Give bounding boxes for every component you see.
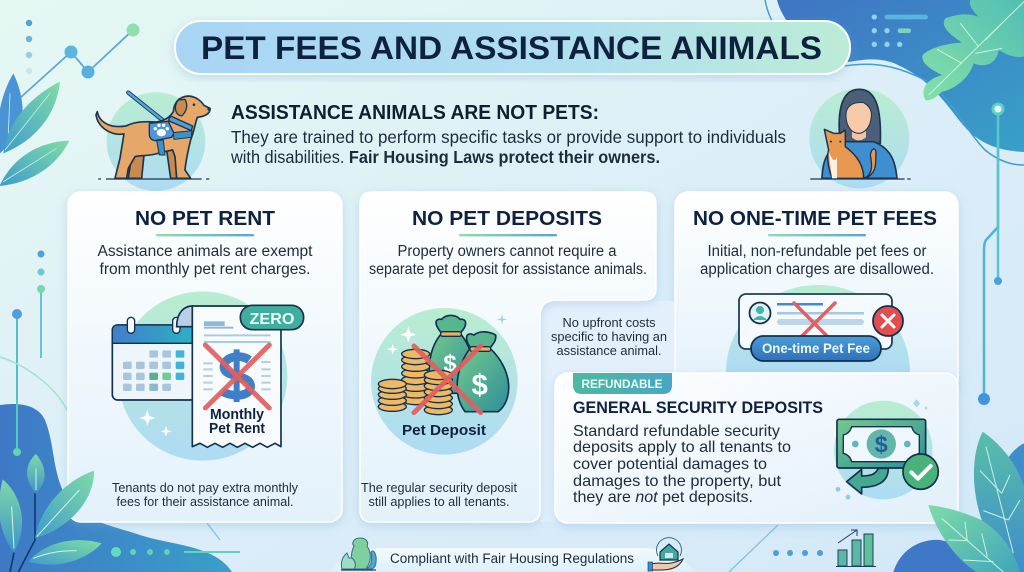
icon: calendar and receipt with zero (112, 291, 304, 461)
tab: refundable: REFUNDABLE (582, 379, 663, 391)
text: pet deposits description: separate pet deposit for assistance animals. (369, 261, 647, 278)
text: no pet rent footnote: Tenants do not pay extra monthly (112, 480, 298, 495)
icon: money bags and coins: $ (443, 351, 457, 378)
text: one-time fees description: application charges are disallowed. (700, 261, 934, 278)
text: one-time fees description: Initial, non-refundable pet fees or (708, 243, 926, 260)
text: security deposits description: Standard refundable security (573, 423, 780, 440)
background: top-right blob and leaf (765, 0, 1024, 165)
heading: no pet deposits: NO PET DEPOSITS (412, 207, 602, 230)
text: no pet rent footnote (112, 480, 298, 509)
plant: bottom-right leaves over the card corner (928, 432, 1024, 572)
icon: one-time fee form (726, 285, 910, 372)
title banner: PET FEES AND ASSISTANCE ANIMALS (201, 30, 822, 66)
text: pet deposits footnote (361, 480, 517, 509)
text: security deposits description: cover potential damages to (573, 456, 767, 473)
heading: no one-time pet fees: NO ONE-TIME PET FEES (693, 207, 937, 230)
label: monthly pet rent: Monthly (210, 407, 264, 423)
icon: guide dog (96, 92, 211, 191)
panel: no pet deposits (360, 192, 656, 522)
footer: compliance banner (332, 538, 693, 572)
panel: no upfront costs note: No upfront costs (562, 316, 656, 330)
background: top-left chart line and leaves (0, 20, 139, 186)
label: zero badge: ZERO (250, 311, 294, 328)
intro text block: ASSISTANCE ANIMALS ARE NOT PETS: (231, 102, 599, 124)
label: pet deposit: Pet Deposit (402, 422, 486, 439)
plant: bottom-left leaves over the card corner (0, 454, 102, 572)
title banner (175, 21, 850, 74)
icon: dog and cat (341, 538, 376, 570)
text: pet deposits footnote: still applies to all tenants. (368, 494, 510, 509)
background: bottom-right blobs (893, 443, 1024, 572)
icon: one-time fee form: One-time Pet Fee (762, 340, 870, 356)
panel: no upfront costs note (540, 301, 674, 522)
intro text block: They are trained to perform specific tasks or provide support to individuals (231, 127, 786, 147)
decorative dots and mini bar chart (773, 530, 876, 566)
label: monthly pet rent: Pet Rent (209, 421, 265, 437)
intro text block: with disabilities. Fair Housing Laws protect their owners. (230, 147, 660, 167)
panel: no upfront costs note: assistance animal. (556, 344, 662, 358)
background: bottom-left blob (0, 400, 240, 572)
heading: no pet rent: NO PET RENT (135, 207, 275, 230)
text: compliance note: Compliant with Fair Housing Regulations (390, 551, 634, 566)
icon: banknote with check: $ (875, 432, 888, 458)
text: no pet rent description: from monthly pet rent charges. (100, 261, 310, 278)
icon: banknote with check (834, 399, 938, 499)
text: security deposits description (573, 423, 791, 506)
text: pet deposits description: Property owners cannot require a (398, 243, 617, 260)
tab: refundable (573, 373, 672, 394)
text: pet deposits footnote: The regular security deposit (361, 480, 517, 495)
panel: no pet rent (68, 192, 342, 522)
text: no pet rent description: Assistance animals are exempt (98, 243, 313, 260)
text: one-time fees description (700, 243, 934, 278)
text: security deposits description: they are not pet deposits. (573, 489, 753, 506)
heading: general security deposits: GENERAL SECURITY DEPOSITS (573, 399, 823, 417)
label: monthly pet rent (209, 407, 265, 437)
icon: money bags and coins: $ (471, 369, 488, 402)
text: no pet rent description (98, 243, 313, 278)
panel: no one-time pet fees (675, 192, 958, 392)
text: pet deposits description (369, 243, 647, 278)
icon: money bags and coins (371, 308, 518, 455)
icon: house on hand (648, 538, 683, 571)
background: circuit lines on the right (978, 104, 1003, 405)
text: no pet rent footnote: fees for their assistance animal. (116, 494, 294, 509)
icon: person with cat (809, 88, 911, 188)
intro text block (230, 102, 786, 167)
background: left circuit lines (0, 250, 778, 572)
panel: general security deposits (555, 373, 958, 523)
text: security deposits description: damages to the property, but (573, 473, 782, 490)
panel: no upfront costs note: specific to having an (551, 330, 667, 344)
text: security deposits description: deposits apply to all tenants to (573, 439, 791, 456)
